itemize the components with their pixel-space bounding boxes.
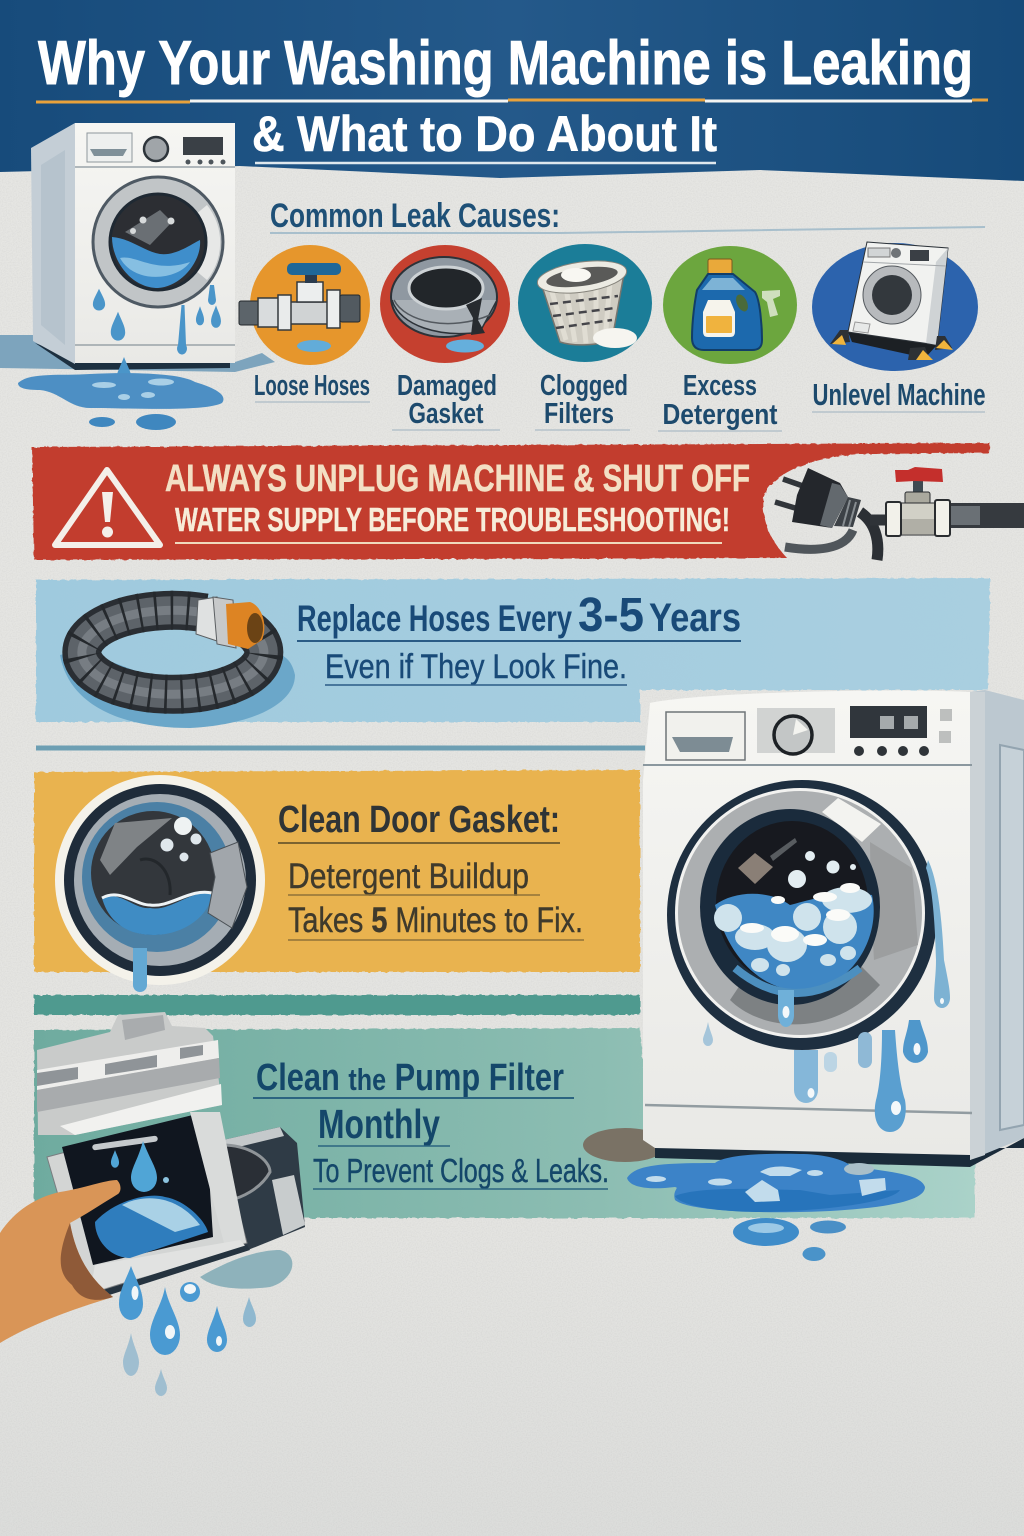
icon: clogged filters (518, 244, 652, 362)
label: excess detergent (658, 370, 782, 431)
label: clogged filters (535, 370, 630, 430)
hose replacement text (297, 589, 741, 686)
panel: clean door gasket (34, 770, 640, 992)
label: loose hoses: Loose Hoses (254, 370, 370, 402)
divider band (36, 746, 645, 750)
puddle (627, 1154, 925, 1261)
gasket text: Takes 5 Minutes to Fix. (288, 901, 583, 940)
warning text: WATER SUPPLY BEFORE TROUBLESHOOTING! (175, 501, 730, 538)
icon: plug and water valve (775, 467, 1024, 560)
icon: hose coil (60, 597, 295, 728)
hose replacement text: 3-5 (578, 589, 644, 642)
icon: damaged gasket (380, 245, 510, 363)
large washing machine illustration (583, 690, 1024, 1261)
icon: door gasket (55, 775, 265, 992)
gasket text: Detergent Buildup (288, 857, 529, 896)
label: clogged filters: Clogged (540, 370, 628, 402)
pump filter text (253, 1057, 609, 1189)
warning text (165, 458, 750, 543)
hose replacement text: Years (649, 596, 741, 640)
label: loose hoses (254, 370, 370, 402)
hose replacement text: Replace Hoses Every (297, 598, 572, 639)
section heading: common leak causes: Common Leak Causes: (270, 197, 560, 235)
pump filter text: Clean the Pump Filter (256, 1057, 564, 1099)
label: clogged filters: Filters (544, 398, 614, 430)
gasket text (278, 799, 584, 940)
panel: replace hoses (36, 578, 990, 728)
control panel (666, 706, 952, 760)
subtitle: & What to Do About It (252, 106, 717, 162)
section heading: common leak causes (270, 197, 985, 235)
icon: unlevel machine (812, 242, 978, 371)
icon: pump filter in hand (0, 1012, 305, 1396)
label: damaged gasket (392, 370, 500, 430)
puddle (18, 373, 223, 430)
header banner (0, 0, 1024, 181)
icon: warning triangle (55, 470, 160, 545)
hose replacement text: Even if They Look Fine. (325, 648, 627, 686)
drips (703, 860, 950, 1132)
label: damaged gasket: Gasket (408, 398, 484, 430)
label: damaged gasket: Damaged (397, 370, 497, 402)
hand (0, 1180, 120, 1343)
label: excess detergent: Excess (683, 370, 757, 402)
pump filter text: Monthly (318, 1101, 440, 1147)
small washing machine illustration (0, 123, 275, 430)
icon: loose hoses (239, 245, 370, 365)
panel: clean pump filter (0, 995, 975, 1396)
label: excess detergent: Detergent (662, 399, 778, 431)
door and suds (667, 780, 937, 1050)
gasket text: Clean Door Gasket: (278, 799, 560, 841)
warning text: ALWAYS UNPLUG MACHINE & SHUT OFF (165, 458, 750, 500)
warning banner (32, 443, 1024, 560)
icon: excess detergent (663, 246, 797, 364)
pump filter text: To Prevent Clogs & Leaks. (313, 1152, 609, 1189)
